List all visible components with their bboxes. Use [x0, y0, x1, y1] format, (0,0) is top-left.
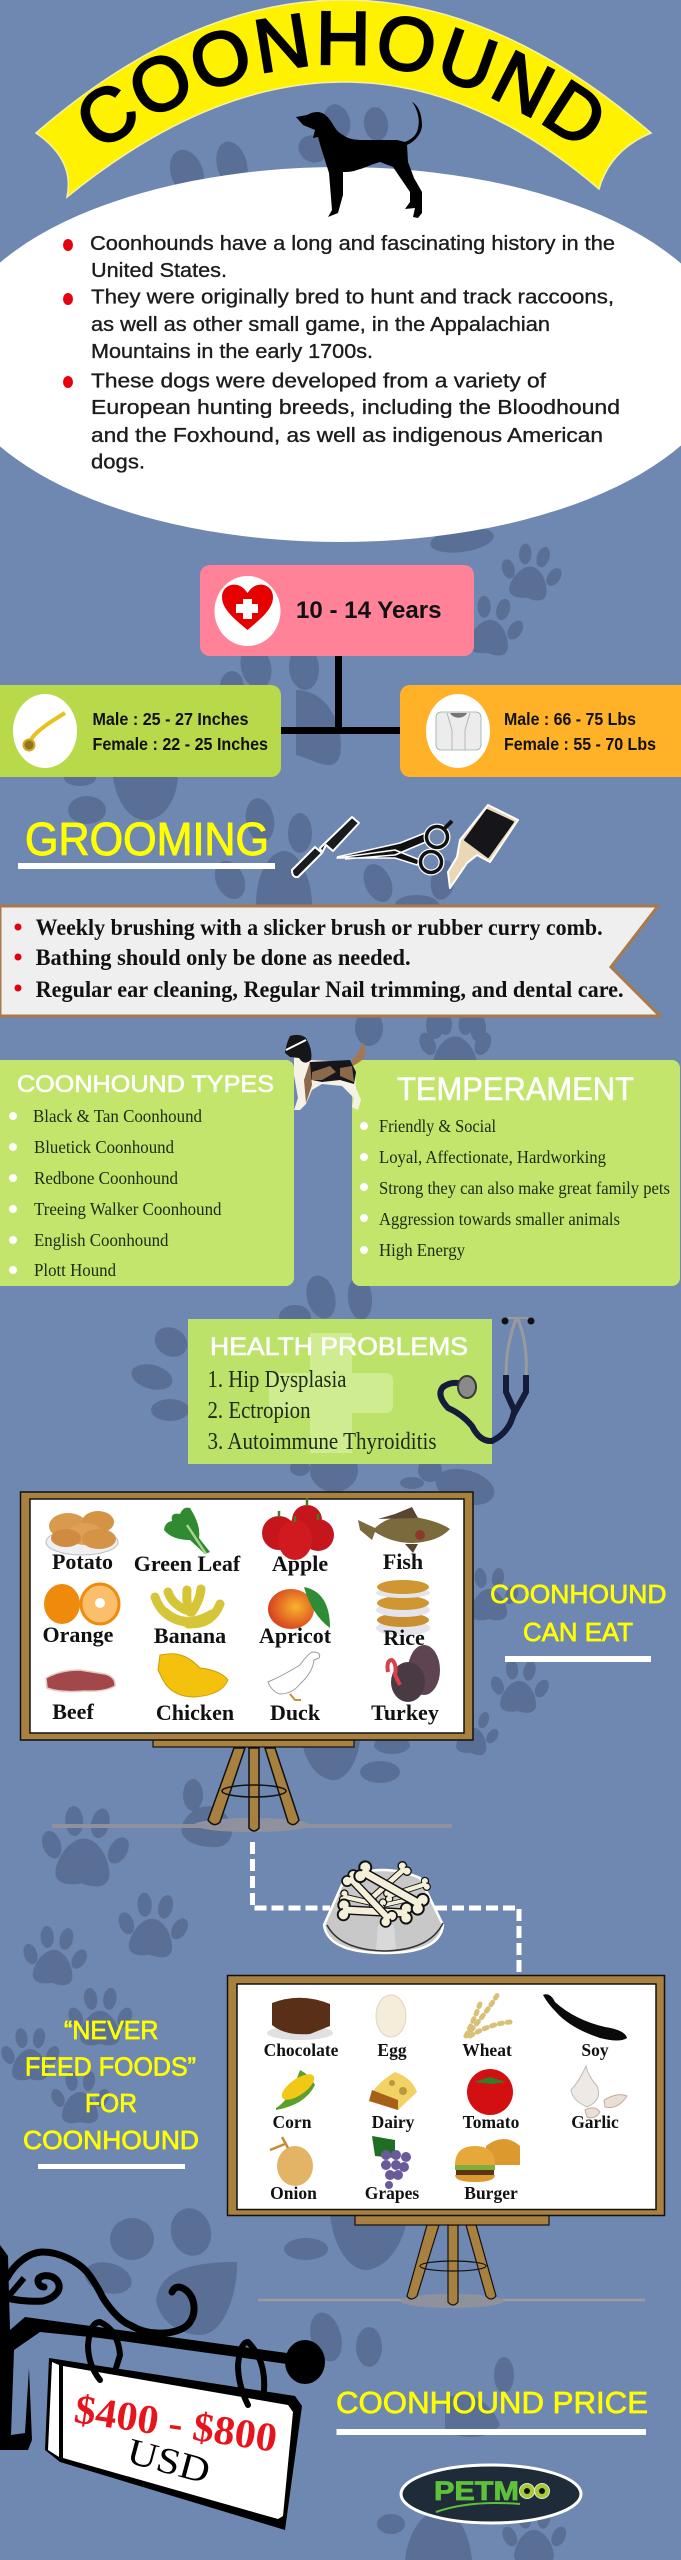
food: turkey: [388, 1645, 440, 1702]
panel: health problems: [188, 1319, 492, 1464]
temperament list: Friendly & Social: [379, 1116, 496, 1136]
ribbon bullets: [14, 924, 22, 992]
types list: English Coonhound: [34, 1230, 168, 1250]
health list: 3. Autoimmune Thyroiditis: [208, 1429, 436, 1455]
food: apple: [262, 1498, 334, 1560]
food: grapes: [372, 2136, 411, 2189]
food: garlic: [571, 2066, 627, 2118]
icon: hanging sign bracket: [0, 2245, 325, 2450]
panel: temperament: [352, 1060, 680, 1286]
food labels: can eat: Apple: [272, 1551, 328, 1576]
food labels: can eat: Fish: [383, 1549, 423, 1574]
logo: petmoo: [401, 2465, 581, 2523]
price text: $400 - $800: [72, 2385, 280, 2461]
temperament list: High Energy: [379, 1240, 465, 1260]
panel: coonhound types: [0, 1060, 294, 1286]
heading: price: COONHOUND PRICE: [336, 2385, 648, 2420]
food labels: never feed: Garlic: [571, 2112, 619, 2132]
icon: hair brush: [448, 805, 518, 888]
intro text: Mountains in the early 1700s.: [91, 341, 373, 363]
connector lines: [281, 656, 400, 730]
intro text: [90, 233, 620, 474]
food: chicken: [158, 1654, 228, 1697]
food: burger: [455, 2139, 520, 2182]
food: banana: [155, 1589, 220, 1624]
food: potato: [46, 1511, 118, 1555]
height text: Male : 25 - 27 Inches: [92, 709, 249, 729]
intro text: European hunting breeds, including the Bloodhound: [91, 397, 620, 419]
food labels: can eat: Green Leaf: [134, 1551, 241, 1576]
food labels: never feed: Burger: [464, 2183, 518, 2203]
food labels: can eat: Rice: [383, 1625, 425, 1650]
icon: scissors: [337, 821, 452, 872]
food: soy: [543, 1994, 627, 2040]
food labels: never feed: Chocolate: [264, 2040, 339, 2060]
food: fish: [358, 1507, 450, 1553]
intro text: They were originally bred to hunt and track raccoons,: [91, 287, 614, 309]
temperament list: Loyal, Affectionate, Hardworking: [379, 1147, 606, 1167]
types list: Treeing Walker Coonhound: [34, 1199, 222, 1219]
food labels: can eat: Orange: [43, 1622, 114, 1647]
dashed connector: [252, 1842, 519, 1975]
weight text: Male : 66 - 75 Lbs: [504, 709, 636, 729]
temperament list: Aggression towards smaller animals: [379, 1209, 620, 1229]
health heading: HEALTH PROBLEMS: [210, 1333, 468, 1361]
easel legs: [407, 2225, 496, 2305]
food: tomato: [467, 2069, 513, 2115]
icon: faint cross: [269, 1333, 393, 1453]
panel: never feed board: [228, 1976, 664, 2308]
food labels: can eat: Chicken: [156, 1700, 234, 1725]
panel: can eat board: [20, 1492, 473, 1832]
icon: tricolor dog: [285, 1035, 365, 1110]
ribbon text: Bathing should only be done as needed.: [36, 945, 411, 970]
food: apricot: [268, 1587, 330, 1629]
temperament heading: TEMPERAMENT: [397, 1071, 634, 1107]
food labels: can eat: Banana: [154, 1623, 226, 1648]
intro bullets: [63, 239, 73, 388]
health list: 2. Ectropion: [208, 1398, 310, 1424]
icon: comb: [292, 817, 359, 877]
types list: Black & Tan Coonhound: [33, 1106, 202, 1126]
icon: stethoscope: [440, 1318, 534, 1441]
food labels: can eat: Apricot: [259, 1623, 332, 1648]
icon: heart with cross: [222, 585, 273, 630]
food: egg: [376, 1995, 406, 2037]
heading: price: [336, 2385, 648, 2435]
food: dairy: [369, 2072, 417, 2110]
food: beef: [46, 1670, 115, 1692]
food labels: never feed: Corn: [273, 2112, 312, 2132]
heading: can eat: CAN EAT: [523, 1617, 633, 1647]
food: rice: [376, 1580, 430, 1636]
types list: Plott Hound: [34, 1260, 116, 1280]
currency text: USD: [123, 2431, 214, 2492]
food: corn: [276, 2070, 318, 2110]
food: wheat: [466, 1994, 510, 2036]
heading: never feed foods: “NEVER: [64, 2015, 158, 2045]
health list: [208, 1367, 436, 1455]
intro text: These dogs were developed from a variety of: [91, 370, 546, 392]
heading: never feed foods: [23, 2015, 199, 2169]
height text: [92, 709, 268, 754]
heading: never feed foods: FEED FOODS”: [25, 2052, 196, 2082]
panel: height: [0, 685, 281, 777]
food: onion: [270, 2137, 313, 2186]
panel: grooming ribbon: [0, 906, 660, 1016]
easel legs: [208, 1748, 299, 1831]
easel ground shadow: [258, 2294, 645, 2308]
ribbon text: Weekly brushing with a slicker brush or rubber curry comb.: [36, 915, 603, 940]
title banner: [34, 0, 652, 199]
intro text: dogs.: [91, 452, 145, 474]
heading: never feed foods: COONHOUND: [23, 2125, 199, 2155]
ribbon text: [36, 915, 624, 1002]
types list: Redbone Coonhound: [34, 1168, 178, 1188]
food: duck: [268, 1652, 320, 1700]
food labels: can eat: Duck: [270, 1700, 321, 1725]
ribbon text: Regular ear cleaning, Regular Nail trimming, and dental care.: [36, 977, 624, 1002]
food labels: never feed: [264, 2040, 619, 2203]
food: orange: [44, 1584, 119, 1624]
icon: dog silhouette: [296, 102, 422, 218]
intro text: and the Foxhound, as well as indigenous American: [91, 425, 603, 447]
food labels: never feed: Tomato: [463, 2112, 520, 2132]
food labels: can eat: Turkey: [371, 1700, 439, 1725]
sign rings: [88, 2322, 264, 2405]
easel ground shadow: [52, 1818, 452, 1832]
food labels: never feed: Wheat: [462, 2040, 512, 2060]
icon: bowl of bones: [324, 1859, 443, 1953]
types list: Bluetick Coonhound: [34, 1137, 174, 1157]
temperament bullets: [360, 1122, 368, 1254]
heading: can eat: [490, 1579, 666, 1662]
lifespan text: 10 - 14 Years: [296, 597, 442, 624]
icon: weighing scale: [436, 712, 481, 750]
intro text: Coonhounds have a long and fascinating history in the: [90, 233, 615, 255]
food labels: never feed: Soy: [581, 2040, 609, 2060]
heading: can eat: COONHOUND: [490, 1579, 666, 1609]
heading: grooming: GROOMING: [25, 813, 269, 865]
food labels: can eat: Beef: [52, 1699, 94, 1724]
food labels: never feed: Grapes: [365, 2183, 419, 2203]
food labels: never feed: Egg: [377, 2040, 407, 2060]
types heading: COONHOUND TYPES: [17, 1071, 274, 1098]
weight text: [504, 709, 656, 754]
logo: petmoo: PETM: [434, 2476, 519, 2506]
types bullets: [9, 1112, 17, 1274]
food: green leaf: [164, 1508, 210, 1554]
title text: COONHOUND: [80, 10, 602, 142]
panel: price sign: [45, 2322, 302, 2530]
temperament list: [379, 1116, 670, 1260]
intro text: United States.: [91, 260, 227, 282]
types list: [33, 1106, 222, 1280]
food labels: can eat: [43, 1549, 439, 1725]
panel: weight: [400, 685, 681, 777]
food labels: never feed: Dairy: [372, 2112, 415, 2132]
height text: Female : 22 - 25 Inches: [92, 734, 268, 754]
panel: intro ellipse: [0, 167, 681, 542]
weight text: Female : 55 - 70 Lbs: [504, 734, 656, 754]
food: chocolate: [267, 1998, 333, 2040]
health list: 1. Hip Dysplasia: [208, 1367, 347, 1393]
heading: never feed foods: FOR: [85, 2088, 137, 2118]
food labels: can eat: Potato: [52, 1549, 113, 1574]
icon: tape measure: [24, 713, 65, 750]
intro text: as well as other small game, in the Appalachian: [91, 314, 550, 336]
food labels: never feed: Onion: [270, 2183, 317, 2203]
panel: life expectancy: [200, 565, 474, 656]
